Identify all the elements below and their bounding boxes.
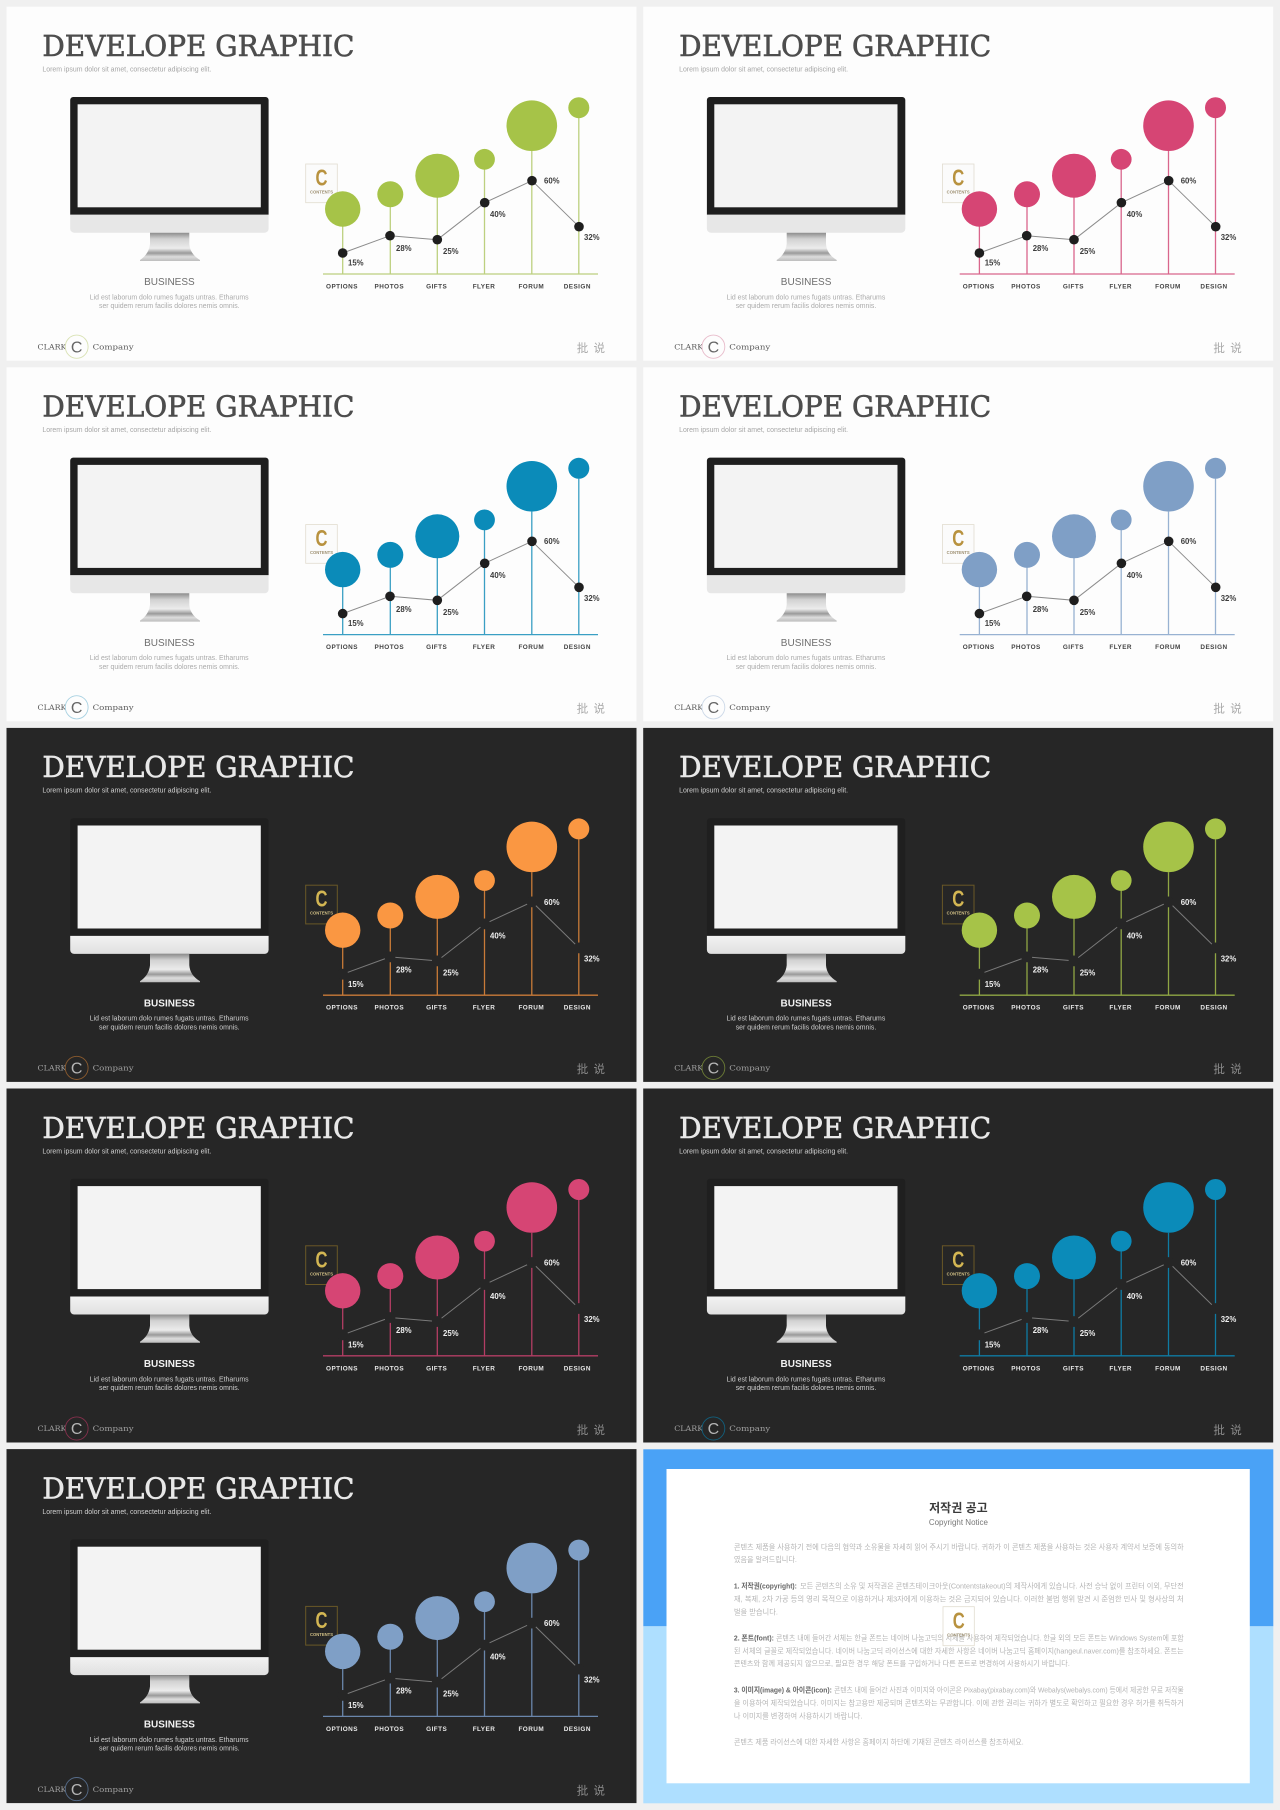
notice body text: 콘텐츠 제품 라이선스에 대한 자세한 사항은 홈페이지 하단에 기재된 콘텐츠 라이선스를 참조하세요. (734, 1736, 1024, 1746)
notice body text: 콘텐츠 제품을 사용하기 전에 다음의 협약과 소유물을 자세히 읽어 주시기 바랍니다. 귀하가 이 콘텐츠 제품을 사용하는 것은 사용자 계약서 보증에 동의하 (734, 1542, 1184, 1552)
caption: business: Lid est laborum dolo rumes fugats untras. Etharums (90, 294, 249, 302)
subtitle: Lorem ipsum dolor sit amet, consectetur adipiscing elit. (679, 427, 848, 434)
chart: lollipop and line: FORUM (518, 644, 544, 651)
notice body text: 콘텐츠 내에 들어간 사진과 이미지와 아이콘은 Pixabay(pixabay.com)와 Webalys(webalys.com) 등에서 제공한 무료 저작물 (834, 1684, 1184, 1694)
caption: business: ser quidem rerum facilis dolores nemis omnis. (99, 1385, 240, 1392)
chart: lollipop and line: DESIGN (1200, 284, 1228, 290)
logo badge: CONTENTS (310, 190, 333, 194)
footer brand: Company (93, 342, 135, 351)
chart: lollipop and line: 60% (544, 537, 560, 546)
panel: copyright notice (643, 1449, 1273, 1803)
chart: lollipop and line: OPTIONS (963, 644, 995, 651)
chart: lollipop and line: FLYER (1109, 284, 1132, 290)
panel: dark pink (6, 1088, 636, 1442)
chart: lollipop and line (942, 458, 1236, 651)
caption: business: BUSINESS (144, 1359, 195, 1370)
monitor illustration (70, 97, 269, 261)
chart: lollipop and line: 40% (490, 1653, 506, 1662)
monitor illustration (707, 97, 905, 261)
caption: business: BUSINESS (781, 1359, 832, 1370)
footer brand: Company (93, 1785, 135, 1794)
footer mark: 批 说 (577, 340, 606, 356)
chart: lollipop and line: 40% (1127, 931, 1142, 940)
chart: lollipop and line: 25% (1080, 968, 1095, 977)
notice body text: 콘텐츠와 함께 제공되지 않으므로, 필요한 경우 해당 폰트를 구입하거나 다른 폰트로 변경하여 사용하시기 바랍니다. (734, 1658, 1070, 1668)
footer brand: C (708, 700, 719, 717)
notice body text (734, 1542, 1184, 1746)
footer brand: Company (729, 1424, 771, 1433)
monitor illustration (707, 818, 905, 982)
monitor illustration (707, 1179, 905, 1343)
footer brand: Company (729, 1064, 771, 1073)
monitor illustration (70, 1539, 269, 1703)
footer brand (38, 335, 135, 358)
chart: lollipop and line: 25% (443, 608, 459, 617)
chart: lollipop and line: 60% (1181, 177, 1196, 186)
chart: lollipop and line: 28% (396, 1326, 412, 1335)
footer brand (674, 1417, 771, 1440)
chart: lollipop and line: PHOTOS (1011, 644, 1041, 651)
caption: business: Lid est laborum dolo rumes fugats untras. Etharums (727, 1016, 886, 1023)
chart: lollipop and line: 15% (985, 619, 1000, 628)
chart: lollipop and line: GIFTS (1063, 644, 1084, 651)
footer brand (38, 1056, 135, 1080)
chart: lollipop and line (306, 97, 600, 290)
chart: lollipop and line: 28% (1033, 244, 1048, 253)
notice body text: 2. 폰트(font): (734, 1634, 774, 1642)
caption: business (726, 1359, 886, 1392)
footer brand: Company (729, 703, 771, 712)
chart: lollipop and line: 28% (396, 965, 412, 974)
caption: business: Lid est laborum dolo rumes fugats untras. Etharums (90, 1016, 249, 1023)
caption: business: BUSINESS (144, 638, 195, 649)
caption: business: BUSINESS (144, 1720, 195, 1731)
logo badge (306, 1246, 337, 1284)
logo badge (306, 885, 337, 924)
monitor illustration (707, 458, 905, 622)
logo badge: CONTENTS (310, 1632, 333, 1637)
chart: lollipop and line: 60% (1181, 1258, 1196, 1267)
logo badge (942, 525, 974, 563)
chart: lollipop and line: 40% (490, 210, 506, 219)
logo badge: C (316, 1607, 328, 1633)
caption: business (90, 998, 249, 1031)
chart: lollipop and line: 15% (348, 619, 364, 628)
chart: lollipop and line: 60% (1181, 898, 1196, 907)
logo badge: C (952, 164, 964, 190)
chart: lollipop and line: 15% (348, 259, 364, 268)
chart: lollipop and line: GIFTS (1063, 1365, 1084, 1372)
notice body text: 콘텐츠 내에 들어간 서체는 한글 폰트는 네이버 나눔고딕의 서체를 사용하여 제작되었습니다. 한글 외의 모든 폰트는 Windows System에 포함 (776, 1632, 1184, 1642)
footer brand (674, 1056, 771, 1080)
caption: business: ser quidem rerum facilis dolores nemis omnis. (99, 1746, 240, 1753)
caption: business (726, 277, 886, 310)
chart: lollipop and line: GIFTS (426, 284, 448, 290)
footer mark: 批 说 (1213, 1061, 1242, 1077)
chart: lollipop and line: FORUM (1155, 284, 1181, 290)
footer brand: Company (93, 703, 135, 712)
chart: lollipop and line: FORUM (1155, 644, 1181, 651)
notice body text: 모든 콘텐츠의 소유 및 저작권은 콘텐츠테이크아웃(Contentstakeout)의 제작사에게 있습니다. 사전 승낙 없이 프린터 이외, 무단전 (800, 1580, 1184, 1590)
chart: lollipop and line: 28% (396, 1687, 412, 1696)
notice body text: 나 이미지를 변경하여 사용하시기 바랍니다. (734, 1710, 862, 1720)
caption: business: Lid est laborum dolo rumes fugats untras. Etharums (90, 655, 249, 662)
panel: dark slate (6, 1449, 636, 1803)
title: DEVELOPE GRAPHIC (679, 390, 991, 424)
chart: lollipop and line: PHOTOS (375, 1005, 404, 1012)
logo badge: C (316, 164, 328, 190)
chart: lollipop and line: 32% (584, 954, 600, 963)
panel: dark green (643, 728, 1273, 1082)
title: DEVELOPE GRAPHIC (42, 29, 354, 63)
chart: lollipop and line: 15% (985, 1340, 1000, 1349)
title: DEVELOPE GRAPHIC (42, 750, 354, 784)
title: DEVELOPE GRAPHIC (42, 390, 354, 424)
chart: lollipop and line: 32% (1221, 594, 1236, 603)
notice body text: 3. 이미지(image) & 아이콘(icon): (734, 1684, 832, 1694)
footer mark: 批 说 (577, 1061, 606, 1077)
footer mark: 批 说 (1213, 1422, 1242, 1438)
chart: lollipop and line (942, 1179, 1236, 1372)
chart: lollipop and line (306, 1179, 600, 1372)
logo badge: C (952, 525, 964, 551)
logo badge: C (316, 886, 328, 912)
chart: lollipop and line: FORUM (518, 1726, 544, 1733)
chart: lollipop and line: 25% (443, 1329, 459, 1338)
chart: lollipop and line: 28% (1033, 605, 1048, 614)
notice body text: 였음을 알려드립니다. (734, 1554, 797, 1564)
caption: business: ser quidem rerum facilis dolores nemis omnis. (736, 1024, 876, 1031)
chart: lollipop and line: 40% (1127, 571, 1142, 580)
logo badge: CONTENTS (947, 190, 970, 194)
footer brand (38, 696, 135, 719)
chart: lollipop and line: 40% (490, 931, 506, 940)
footer brand: CLARK (674, 703, 704, 712)
subtitle: Lorem ipsum dolor sit amet, consectetur adipiscing elit. (42, 1509, 211, 1516)
chart: lollipop and line: 25% (1080, 1329, 1095, 1338)
chart: lollipop and line: PHOTOS (375, 1365, 404, 1372)
chart: lollipop and line: 25% (443, 1690, 459, 1699)
chart: lollipop and line: FORUM (1155, 1005, 1181, 1012)
chart: lollipop and line: OPTIONS (326, 1365, 358, 1372)
caption: business: ser quidem rerum facilis dolores nemis omnis. (736, 1385, 876, 1392)
subtitle: Lorem ipsum dolor sit amet, consectetur adipiscing elit. (679, 66, 848, 74)
footer brand: CLARK (38, 703, 67, 712)
chart: lollipop and line: PHOTOS (1011, 1005, 1041, 1012)
panel: light pink (643, 7, 1273, 361)
chart: lollipop and line: PHOTOS (1011, 1365, 1041, 1372)
caption: business (90, 1359, 249, 1392)
caption: business: Lid est laborum dolo rumes fugats untras. Etharums (727, 655, 886, 662)
chart: lollipop and line: DESIGN (1200, 644, 1228, 651)
notice body text: 재, 복제, 2차 가공 등의 영리 목적으로 이용하거나 제3자에게 이용하는 것은 금지되어 있습니다. 이러한 불법 행위 발견 시 준엄한 민사 및 형사상의 처 (734, 1594, 1184, 1604)
footer brand: C (71, 700, 82, 717)
chart: lollipop and line: 28% (396, 244, 412, 253)
logo badge (942, 1246, 974, 1284)
panel: dark blue (643, 1088, 1273, 1442)
panel: dark orange (6, 728, 636, 1082)
title: DEVELOPE GRAPHIC (679, 750, 991, 784)
subtitle: Lorem ipsum dolor sit amet, consectetur adipiscing elit. (679, 1148, 848, 1155)
chart: lollipop and line (942, 818, 1236, 1012)
chart: lollipop and line: PHOTOS (375, 644, 404, 651)
panel: light slate (643, 367, 1273, 721)
caption: business: Lid est laborum dolo rumes fugats untras. Etharums (90, 1737, 249, 1744)
chart: lollipop and line: GIFTS (1063, 284, 1084, 290)
footer brand: C (708, 1421, 719, 1438)
chart: lollipop and line: FLYER (473, 1005, 495, 1012)
caption: business: ser quidem rerum facilis dolores nemis omnis. (736, 664, 876, 671)
chart: lollipop and line: 32% (1221, 233, 1236, 242)
chart: lollipop and line: FORUM (518, 284, 544, 290)
footer mark: 批 说 (577, 1782, 606, 1798)
subtitle: Lorem ipsum dolor sit amet, consectetur adipiscing elit. (42, 788, 211, 795)
chart: lollipop and line: OPTIONS (963, 1005, 995, 1012)
chart: lollipop and line: OPTIONS (963, 1365, 995, 1372)
footer brand: CLARK (38, 1064, 67, 1073)
footer brand: Company (93, 1064, 135, 1073)
title: DEVELOPE GRAPHIC (679, 1111, 991, 1145)
chart: lollipop and line: GIFTS (426, 1726, 448, 1733)
chart: lollipop and line: DESIGN (564, 1365, 591, 1372)
chart: lollipop and line: 60% (544, 177, 560, 186)
subtitle: Lorem ipsum dolor sit amet, consectetur adipiscing elit. (42, 427, 211, 434)
chart: lollipop and line: 60% (544, 1619, 560, 1628)
chart: lollipop and line (306, 818, 600, 1012)
logo badge: CONTENTS (310, 1271, 333, 1276)
chart: lollipop and line: 28% (396, 605, 412, 614)
chart: lollipop and line (942, 97, 1236, 290)
logo badge: CONTENTS (947, 1271, 970, 1276)
footer mark: 批 说 (577, 701, 606, 717)
chart: lollipop and line: 15% (348, 1701, 364, 1710)
chart: lollipop and line: PHOTOS (375, 284, 404, 290)
footer brand: C (71, 1782, 82, 1799)
chart: lollipop and line: FORUM (518, 1005, 544, 1012)
notice body text: 을 이용하여 제작되었습니다. 이미지는 참고용만 제공되며 콘텐츠와는 무관합니다. 이에 관한 권리는 귀하가 별도로 확인하고 필요한 경우 허가를 취득하거 (734, 1698, 1184, 1708)
logo badge: CONTENTS (947, 911, 970, 916)
chart: lollipop and line: 28% (1033, 1326, 1048, 1335)
caption: business: Lid est laborum dolo rumes fugats untras. Etharums (727, 294, 886, 302)
chart: lollipop and line: FORUM (1155, 1365, 1181, 1372)
chart: lollipop and line: 28% (1033, 965, 1048, 974)
caption: business (90, 638, 249, 671)
caption: business: ser quidem rerum facilis dolores nemis omnis. (99, 303, 240, 310)
chart: lollipop and line: GIFTS (426, 1005, 448, 1012)
footer brand: CLARK (38, 342, 67, 351)
title: DEVELOPE GRAPHIC (42, 1111, 354, 1145)
footer brand: C (71, 339, 82, 356)
chart: lollipop and line: DESIGN (564, 284, 591, 290)
chart: lollipop and line: GIFTS (1063, 1005, 1084, 1012)
caption: business: Lid est laborum dolo rumes fugats untras. Etharums (90, 1376, 249, 1383)
logo badge: C (952, 886, 964, 912)
monitor illustration (70, 1179, 269, 1343)
caption: business: BUSINESS (144, 998, 195, 1009)
chart: lollipop and line: 32% (1221, 1315, 1236, 1324)
subtitle: Lorem ipsum dolor sit amet, consectetur adipiscing elit. (42, 66, 211, 74)
chart: lollipop and line: DESIGN (564, 1726, 591, 1733)
chart: lollipop and line: FLYER (1109, 644, 1132, 651)
notice body text: 된 서체의 글꼴로 제작되었습니다. 네이버 나눔고딕 라이선스에 대한 자세한 사항은 네이버 나눔고딕 홈페이지(hangeul.naver.com)를 참조하세요. 폰트는 (734, 1646, 1184, 1656)
caption: business (726, 998, 886, 1031)
chart: lollipop and line: GIFTS (426, 1365, 448, 1372)
chart: lollipop and line: 15% (985, 980, 1000, 989)
chart: lollipop and line: DESIGN (1200, 1005, 1228, 1012)
chart: lollipop and line: 15% (348, 980, 364, 989)
caption: business: BUSINESS (781, 638, 832, 649)
logo badge: CONTENTS (310, 911, 333, 916)
chart: lollipop and line: FLYER (1109, 1005, 1132, 1012)
chart: lollipop and line: FORUM (518, 1365, 544, 1372)
chart: lollipop and line: 60% (1181, 537, 1196, 546)
chart: lollipop and line: 40% (1127, 1292, 1142, 1301)
logo badge (942, 164, 974, 203)
logo badge: C (316, 1246, 328, 1272)
footer brand: C (708, 339, 719, 356)
logo watermark: CONTENTS (947, 1632, 970, 1638)
logo badge: C (316, 525, 328, 551)
logo badge (942, 885, 974, 924)
chart: lollipop and line: FLYER (473, 1726, 495, 1733)
notice body text: 1. 저작권(copyright): (734, 1580, 797, 1590)
chart: lollipop and line: 40% (1127, 210, 1142, 219)
chart: lollipop and line: OPTIONS (963, 284, 995, 290)
chart: lollipop and line: DESIGN (564, 1005, 591, 1012)
chart: lollipop and line: 40% (490, 1292, 506, 1301)
footer brand: C (71, 1061, 82, 1078)
chart: lollipop and line: OPTIONS (326, 1726, 358, 1733)
chart: lollipop and line: 15% (348, 1340, 364, 1349)
footer brand: CLARK (674, 342, 704, 351)
footer mark: 批 说 (1213, 340, 1242, 356)
logo badge (306, 1606, 337, 1645)
chart: lollipop and line: 32% (1221, 954, 1236, 963)
caption: business: BUSINESS (144, 277, 195, 288)
caption: business: BUSINESS (781, 277, 832, 288)
monitor illustration (70, 458, 269, 622)
chart: lollipop and line: 60% (544, 1258, 560, 1267)
caption: business: Lid est laborum dolo rumes fugats untras. Etharums (727, 1376, 886, 1383)
footer brand: Company (93, 1424, 135, 1433)
chart: lollipop and line: 15% (985, 259, 1000, 268)
logo badge (306, 164, 337, 203)
notice heading: Copyright Notice (929, 1518, 989, 1527)
chart: lollipop and line (306, 1540, 600, 1733)
footer brand: CLARK (674, 1424, 704, 1433)
chart: lollipop and line (306, 458, 600, 651)
logo watermark (943, 1607, 974, 1646)
chart: lollipop and line: 25% (1080, 247, 1095, 256)
notice heading: 저작권 공고 (929, 1500, 988, 1515)
footer brand: CLARK (674, 1064, 704, 1073)
chart: lollipop and line: FLYER (1109, 1365, 1132, 1372)
chart: lollipop and line: PHOTOS (375, 1726, 404, 1733)
footer brand (674, 335, 771, 358)
logo watermark: C (953, 1608, 965, 1634)
logo badge (306, 525, 337, 563)
chart: lollipop and line: PHOTOS (1011, 284, 1041, 290)
caption: business (90, 277, 249, 310)
notice body text: 벌을 받습니다. (734, 1606, 778, 1616)
caption: business: ser quidem rerum facilis dolores nemis omnis. (99, 664, 240, 671)
chart: lollipop and line: OPTIONS (326, 1005, 358, 1012)
footer mark: 批 说 (577, 1422, 606, 1438)
footer brand (38, 1778, 135, 1801)
caption: business: ser quidem rerum facilis dolores nemis omnis. (99, 1024, 240, 1031)
chart: lollipop and line: GIFTS (426, 644, 448, 651)
notice heading (929, 1500, 989, 1527)
caption: business (90, 1720, 249, 1753)
chart: lollipop and line: 32% (584, 1676, 600, 1685)
chart: lollipop and line: 60% (544, 898, 560, 907)
subtitle: Lorem ipsum dolor sit amet, consectetur adipiscing elit. (679, 788, 848, 795)
chart: lollipop and line: 25% (443, 247, 459, 256)
footer mark: 批 说 (1213, 701, 1242, 717)
chart: lollipop and line: FLYER (473, 284, 495, 290)
footer brand: CLARK (38, 1424, 67, 1433)
footer brand: C (708, 1061, 719, 1078)
panel: light blue (6, 367, 636, 721)
chart: lollipop and line: DESIGN (564, 644, 591, 651)
footer brand: C (71, 1421, 82, 1438)
chart: lollipop and line: 32% (584, 233, 600, 242)
chart: lollipop and line: OPTIONS (326, 284, 358, 290)
footer brand: Company (729, 342, 771, 351)
footer brand (674, 696, 771, 719)
chart: lollipop and line: DESIGN (1200, 1365, 1228, 1372)
chart: lollipop and line: FLYER (473, 1365, 495, 1372)
footer brand (38, 1417, 135, 1440)
logo badge: CONTENTS (947, 550, 970, 555)
title: DEVELOPE GRAPHIC (42, 1471, 354, 1505)
caption: business (726, 638, 886, 671)
chart: lollipop and line: 25% (1080, 608, 1095, 617)
monitor illustration (70, 818, 269, 982)
chart: lollipop and line: 32% (584, 594, 600, 603)
caption: business: ser quidem rerum facilis dolores nemis omnis. (736, 303, 876, 310)
chart: lollipop and line: 25% (443, 968, 459, 977)
title: DEVELOPE GRAPHIC (679, 29, 991, 63)
panel: light green (6, 7, 636, 361)
chart: lollipop and line: 32% (584, 1315, 600, 1324)
logo badge: CONTENTS (310, 550, 333, 555)
subtitle: Lorem ipsum dolor sit amet, consectetur adipiscing elit. (42, 1148, 211, 1155)
logo badge: C (952, 1246, 964, 1272)
caption: business: BUSINESS (781, 998, 832, 1009)
footer brand: CLARK (38, 1785, 67, 1794)
chart: lollipop and line: FLYER (473, 644, 495, 651)
chart: lollipop and line: OPTIONS (326, 644, 358, 651)
chart: lollipop and line: 40% (490, 571, 506, 580)
